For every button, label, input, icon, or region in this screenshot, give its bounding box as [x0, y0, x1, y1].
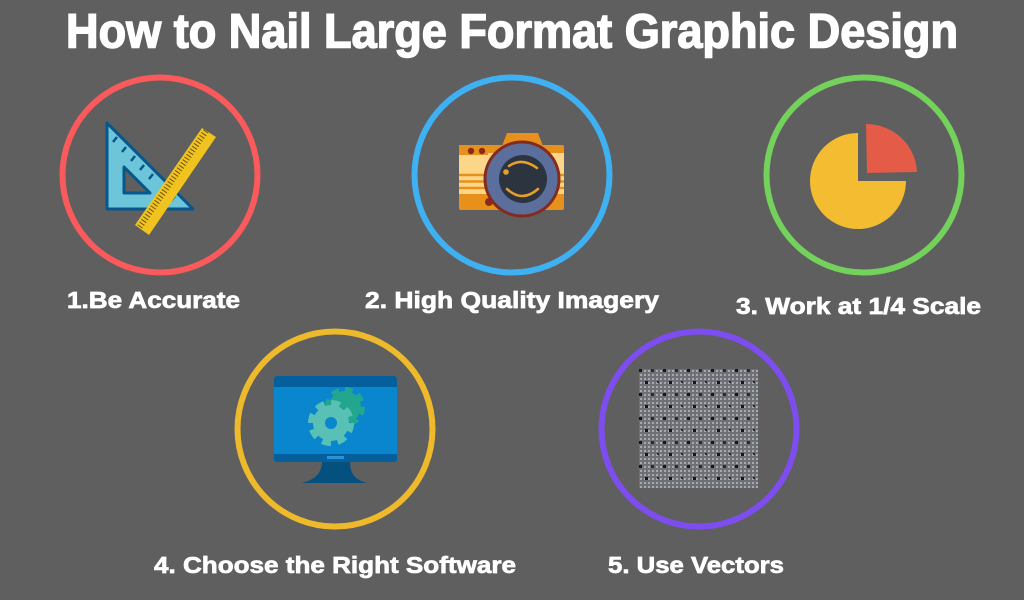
panel: be accurate	[62, 78, 258, 313]
circle: yellow ring	[238, 332, 432, 526]
label 2: 2. High Quality Imagery	[365, 287, 659, 313]
icon: vector dot grid	[639, 369, 758, 488]
circle: blue ring	[414, 78, 610, 272]
label 5: 5. Use Vectors	[608, 552, 784, 578]
panel: use vectors	[602, 332, 796, 578]
circle: green ring	[766, 78, 962, 272]
circle: red ring	[62, 78, 258, 272]
label 3: 3. Work at 1/4 Scale	[736, 293, 981, 319]
icon: set square and ruler	[107, 123, 216, 235]
label 1: 1.Be Accurate	[67, 287, 240, 313]
panel: high quality imagery	[365, 78, 659, 313]
icon: camera	[459, 133, 564, 216]
title: How to Nail Large Format Graphic Design	[66, 6, 958, 58]
icon: pie chart	[810, 124, 917, 229]
panel: choose the right software	[154, 332, 516, 578]
label 4: 4. Choose the Right Software	[154, 552, 516, 578]
icon: monitor with gears	[274, 376, 397, 483]
circle: purple ring	[602, 332, 796, 526]
panel: work at 1/4 scale	[736, 78, 981, 319]
